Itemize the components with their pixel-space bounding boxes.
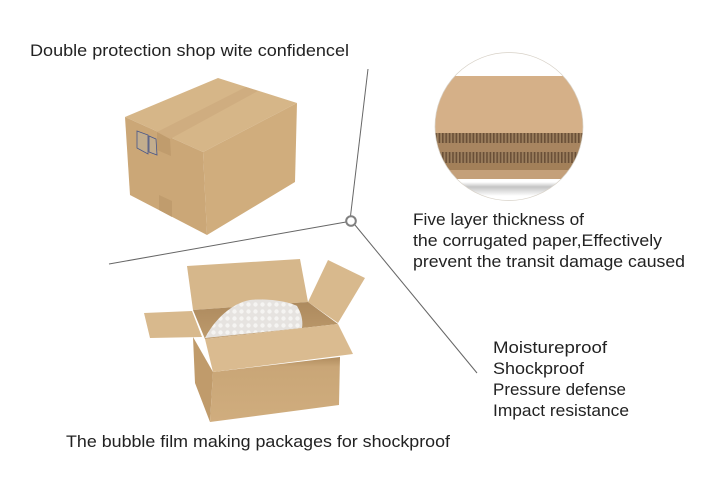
- bubble film: [205, 299, 302, 338]
- text: properties list: [493, 338, 629, 420]
- icon: open cardboard box with bubble film: [144, 259, 365, 422]
- text: properties list: Pressure defense: [493, 380, 626, 399]
- connector lines: [109, 69, 477, 373]
- text: five layer description: [413, 210, 685, 271]
- text: properties list: Impact resistance: [493, 401, 629, 420]
- text: properties list: Moistureproof: [493, 338, 607, 357]
- icon: corrugated paper layers in circle: [430, 52, 590, 200]
- text: five layer description: the corrugated paper,Effectively: [413, 231, 663, 250]
- icon: connector ring: [346, 216, 356, 226]
- text: five layer description: Five layer thickness of: [413, 210, 584, 229]
- icon: closed cardboard box: [125, 78, 297, 235]
- text: properties list: Shockproof: [493, 359, 584, 378]
- title: double protection: Double protection shop wite confidencel: [30, 41, 349, 60]
- caption: bubble film: The bubble film making packages for shockproof: [66, 432, 450, 451]
- text: five layer description: prevent the transit damage caused: [413, 252, 685, 271]
